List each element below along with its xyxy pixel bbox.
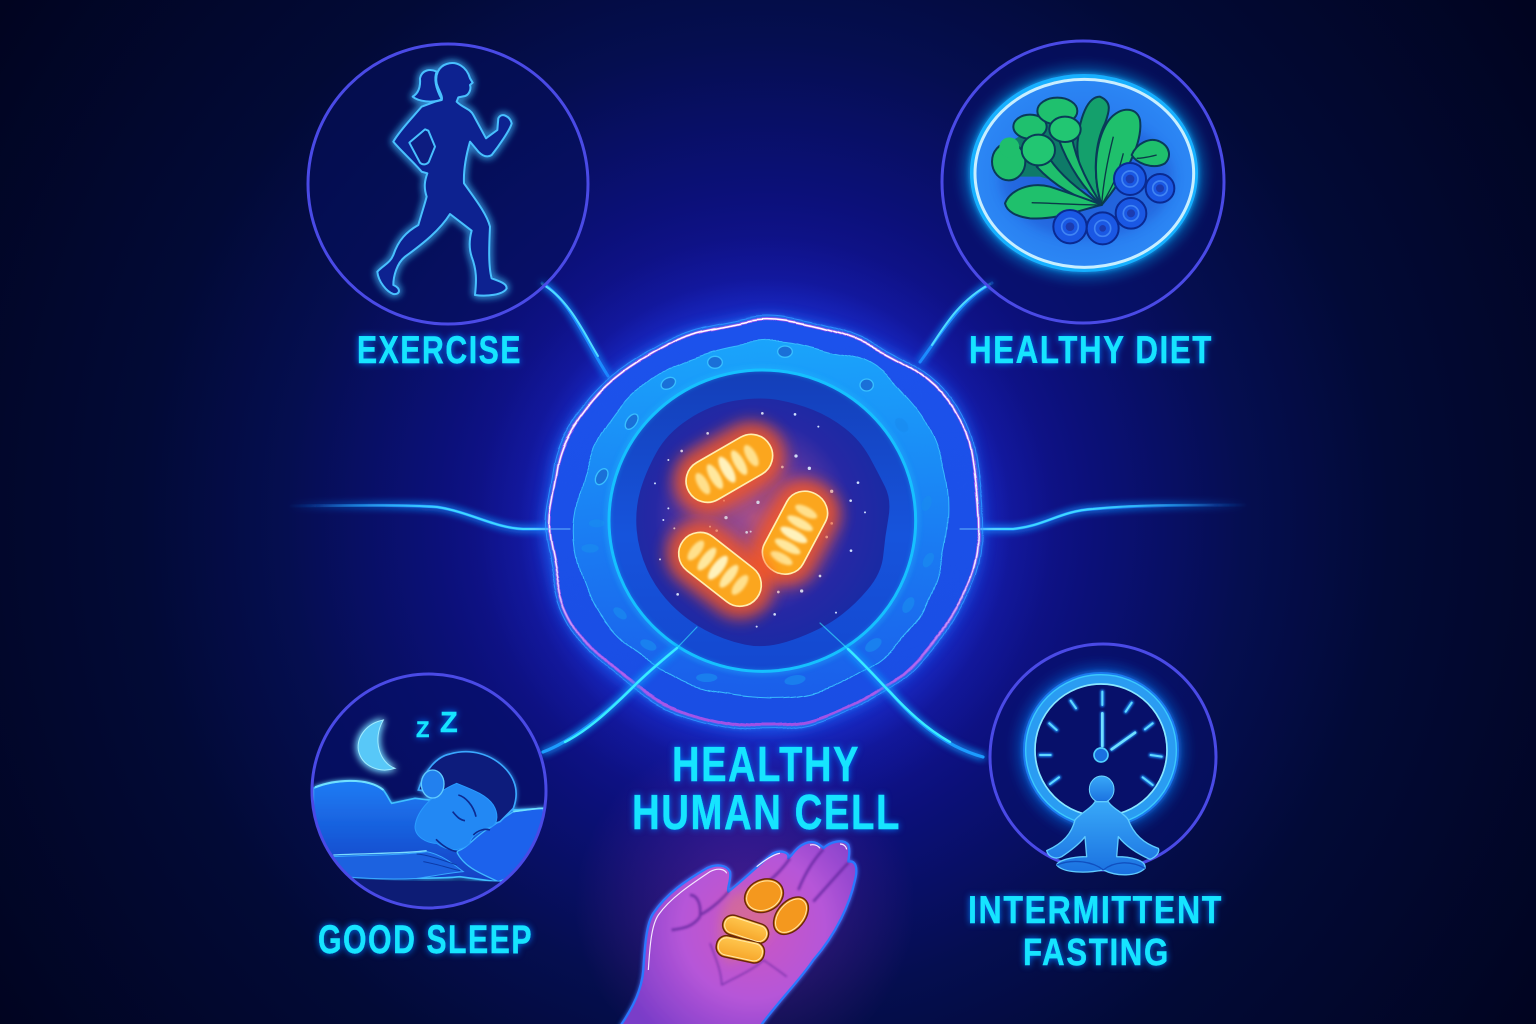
icon: sleeping person bbox=[313, 752, 545, 913]
icon: clock and meditating person bbox=[1025, 674, 1177, 875]
label: intermittent: INTERMITTENT bbox=[968, 889, 1223, 932]
panel: intermittent fasting bbox=[968, 644, 1223, 974]
icon: hand with pills bbox=[620, 841, 856, 1024]
panel: exercise bbox=[308, 44, 588, 372]
label: good sleep: GOOD SLEEP bbox=[318, 918, 533, 962]
ring: fasting bbox=[990, 644, 1216, 870]
ring glow bbox=[608, 369, 917, 673]
label: healthy diet: HEALTHY DIET bbox=[969, 329, 1213, 372]
title: HEALTHY bbox=[672, 738, 860, 792]
sparkle particles bbox=[654, 412, 866, 628]
snore letter small: Z bbox=[416, 717, 431, 742]
nucleus region bbox=[636, 398, 889, 646]
icon: running woman bbox=[377, 63, 512, 296]
connector lines over the cell bbox=[530, 529, 1000, 757]
cell glow bbox=[548, 320, 978, 728]
mitochondrion 2 bbox=[738, 467, 852, 598]
title: HUMAN CELL bbox=[632, 786, 901, 840]
central cell bbox=[544, 316, 982, 731]
panel: healthy diet bbox=[942, 41, 1224, 372]
ring: diet bbox=[942, 41, 1224, 323]
connector lines behind the cell bbox=[288, 283, 1248, 529]
icon: plate of greens and berries bbox=[972, 76, 1196, 270]
mitochondrion 1 bbox=[661, 409, 798, 527]
title bbox=[632, 738, 901, 840]
label: exercise: EXERCISE bbox=[357, 329, 522, 372]
icon: crescent moon bbox=[358, 720, 395, 770]
cell halo bbox=[475, 235, 1055, 815]
ring: sleep bbox=[312, 674, 546, 908]
label: fasting: FASTING bbox=[1023, 932, 1170, 974]
snore letter large: Z bbox=[440, 707, 460, 739]
ring stroke: sleep bbox=[312, 674, 546, 908]
hand aura bbox=[540, 720, 940, 1024]
mitochondrion 3 bbox=[652, 506, 788, 633]
organelles in the band bbox=[581, 346, 936, 686]
cytoplasm band with wavy edge bbox=[574, 341, 947, 697]
panel: good sleep bbox=[312, 674, 546, 962]
outer membrane band and lines bbox=[544, 316, 982, 731]
ring: exercise bbox=[308, 44, 588, 324]
inner ring bbox=[609, 370, 916, 671]
